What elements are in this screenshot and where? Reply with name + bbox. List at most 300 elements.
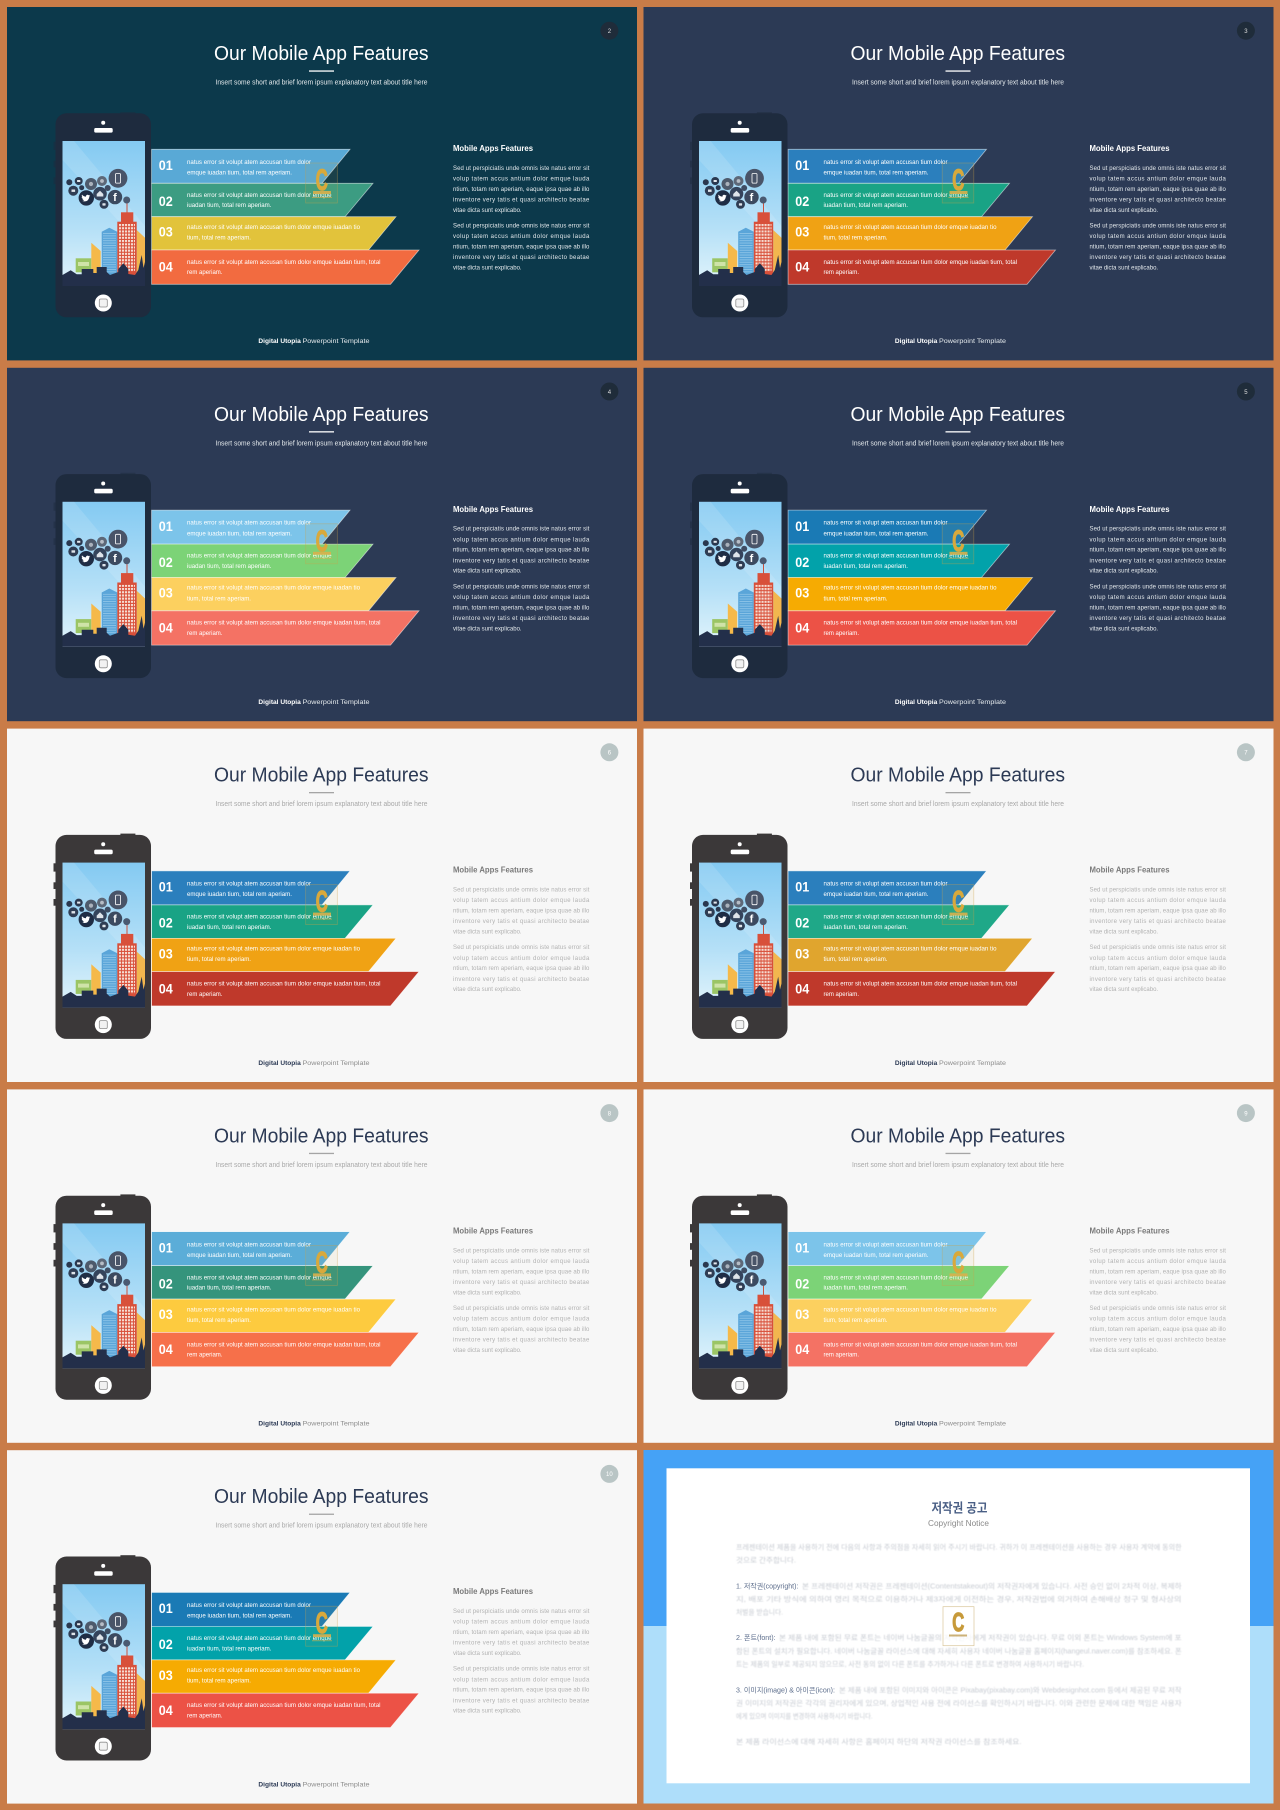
side text block: Sed ut perspiciatis unde omnis iste natus error sit (453, 1609, 590, 1615)
copyright clause 3 (736, 1686, 1182, 1720)
feature bands: 02 (159, 1636, 173, 1652)
feature bands: 03 (795, 945, 809, 961)
footer: Powerpoint Template (302, 1060, 370, 1067)
subtitle: Insert some short and brief lorem ipsum explanatory text about title here (852, 80, 1064, 86)
phone illustration (54, 473, 151, 678)
feature bands: natus error sit volupt atem accusan tium dolor emque (824, 554, 969, 560)
slide 5: navy theme vivid bands (644, 368, 1274, 721)
side text block: inventore very tatis et quasi architecto beatae (453, 1280, 590, 1286)
feature bands: iuadan tium, total rem aperiam. (824, 925, 908, 931)
side text block: inventore very tatis et quasi architecto beatae (1090, 919, 1227, 925)
side text block: Mobile Apps Features (453, 144, 534, 153)
feature bands: 02 (159, 193, 173, 209)
copyright intro (736, 1542, 1182, 1564)
side text block: vitae dicta sunt explicabo. (453, 626, 522, 632)
side text block: Sed ut perspiciatis unde omnis iste natus error sit (453, 887, 590, 893)
slide 10: light theme vivid bands (7, 1450, 637, 1804)
feature bands: emque iuadan tium, total rem aperiam. (824, 892, 929, 898)
side text block: Sed ut perspiciatis unde omnis iste natus error sit (453, 945, 590, 951)
copyright intro: 프레젠테이션 제품을 사용하기 전에 다음의 사항과 주의점을 자세히 읽어 주시기 바랍니다. 귀하가 이 프레젠테이션을 사용하는 경우 사용자 계약에 동의한 (736, 1542, 1182, 1552)
phone illustration (54, 112, 151, 317)
feature bands: 03 (159, 945, 173, 961)
phone illustration (54, 1194, 151, 1400)
side text block: ntium, totam rem aperiam, eaque ipsa quae ab illo (1090, 1327, 1227, 1333)
feature bands: tium, total rem aperiam. (187, 957, 251, 963)
feature bands: 04 (159, 1702, 173, 1718)
footer (895, 338, 1006, 345)
side text block: vitae dicta sunt explicabo. (453, 1290, 522, 1296)
side text block: ntium, totam rem aperiam, eaque ipsa quae ab illo (453, 1269, 590, 1275)
page badge (1237, 1104, 1255, 1122)
slide 2: teal theme (7, 7, 637, 360)
footer (258, 1060, 370, 1067)
footer: Digital Utopia (895, 699, 938, 706)
side text block: vitae dicta sunt explicabo. (453, 569, 522, 575)
phone illustration (690, 473, 788, 678)
feature bands: natus error sit volupt atem accusan tium dolor emque (187, 1636, 332, 1642)
slide 8: light theme (7, 1089, 637, 1443)
side text block: vitae dicta sunt explicabo. (453, 1651, 522, 1657)
page badge: 2 (608, 29, 612, 35)
side text block (453, 866, 590, 993)
side text block: ntium, totam rem aperiam, eaque ipsa quae ab illo (453, 548, 590, 554)
feature bands: 01 (795, 518, 809, 534)
feature bands: iuadan tium, total rem aperiam. (187, 1286, 272, 1292)
footer (258, 338, 370, 345)
watermark logo (306, 885, 337, 925)
feature bands: natus error sit volupt atem accusan tium dolor emque iuadan tium, total (824, 1342, 1017, 1348)
feature bands: rem aperiam. (187, 270, 223, 276)
copyright notice slide (644, 1450, 1274, 1804)
feature bands: 03 (159, 224, 173, 240)
feature bands: natus error sit volupt atem accusan tium dolor emque iuadan tio (187, 1307, 361, 1313)
side text block: ntium, totam rem aperiam, eaque ipsa quae ab illo (1090, 605, 1227, 611)
watermark logo: C (316, 1607, 328, 1640)
page badge (1237, 382, 1255, 400)
side text block: ntium, totam rem aperiam, eaque ipsa quae ab illo (453, 244, 590, 250)
footer: Digital Utopia (895, 1060, 938, 1067)
feature bands (152, 1232, 419, 1367)
subtitle: Insert some short and brief lorem ipsum explanatory text about title here (216, 1162, 428, 1169)
feature bands: 01 (795, 157, 809, 173)
feature bands: rem aperiam. (824, 631, 859, 637)
footer: Digital Utopia (895, 1421, 938, 1428)
watermark logo (942, 524, 974, 564)
side text block: vitae dicta sunt explicabo. (453, 987, 522, 993)
side text block: inventore very tatis et quasi architecto beatae (1090, 1280, 1227, 1286)
side text block: volup tatem accus antium dolor emque lauda (1090, 1259, 1227, 1265)
title: Our Mobile App Features (214, 1125, 428, 1147)
side text block (1090, 866, 1227, 993)
copyright clause 2: 트는 제품의 일부로 제공되지 않으므로, 사전 동의 없이 다른 폰트를 추가하거나 다른 폰트로 변경하여 사용하시기 바랍니다. (736, 1660, 1084, 1668)
side text block: volup tatem accus antium dolor emque lauda (453, 234, 590, 240)
side text block: inventore very tatis et quasi architecto beatae (1090, 198, 1227, 204)
feature bands: natus error sit volupt atem accusan tium dolor emque iuadan tium, total (187, 1342, 380, 1348)
side text block: volup tatem accus antium dolor emque lauda (453, 1620, 590, 1626)
side text block: Mobile Apps Features (453, 1587, 534, 1596)
copyright title: 저작권 공고 (932, 1500, 988, 1516)
subtitle: Insert some short and brief lorem ipsum explanatory text about title here (852, 1162, 1064, 1169)
watermark logo (943, 1607, 974, 1646)
side text block: ntium, totam rem aperiam, eaque ipsa quae ab illo (453, 1688, 590, 1694)
side text block: Sed ut perspiciatis unde omnis iste natus error sit (453, 224, 590, 230)
feature bands: 03 (159, 1306, 173, 1322)
copyright clause 2: 2. 폰트(font): (736, 1634, 776, 1642)
title: Our Mobile App Features (850, 1125, 1065, 1147)
feature bands: 02 (159, 1275, 173, 1291)
feature bands: 03 (795, 224, 809, 240)
feature bands: tium, total rem aperiam. (824, 236, 888, 242)
feature bands: 04 (159, 259, 173, 275)
side text block: inventore very tatis et quasi architecto beatae (1090, 558, 1227, 564)
side text block: inventore very tatis et quasi architecto beatae (1090, 1338, 1227, 1344)
slide 4: navy theme pastel bands (7, 368, 637, 721)
feature bands: iuadan tium, total rem aperiam. (187, 564, 272, 570)
copyright clause 3: 권 이미지의 저작권은 각각의 권리자에게 있으며, 상업적인 사용 전에 라이선스를 확인하시기 바랍니다. 이와 관련한 문제에 대한 책임은 사용자 (736, 1698, 1182, 1708)
feature bands: tium, total rem aperiam. (824, 957, 888, 963)
subtitle: Insert some short and brief lorem ipsum explanatory text about title here (216, 801, 428, 808)
page badge: 10 (606, 1472, 613, 1478)
footer: Digital Utopia (258, 1781, 301, 1788)
feature bands: natus error sit volupt atem accusan tium dolor emque iuadan tio (824, 586, 997, 592)
feature bands: 01 (159, 1239, 173, 1255)
footer: Digital Utopia (258, 1060, 301, 1067)
watermark logo: C (316, 525, 328, 558)
footer (895, 1421, 1006, 1428)
phone illustration (54, 834, 151, 1039)
side text block: Sed ut perspiciatis unde omnis iste natus error sit (1090, 887, 1226, 893)
feature bands: 02 (159, 915, 173, 931)
watermark logo: C (316, 1246, 328, 1279)
subtitle: Insert some short and brief lorem ipsum explanatory text about title here (216, 1523, 428, 1530)
page badge (600, 1465, 618, 1483)
side text block: Sed ut perspiciatis unde omnis iste natus error sit (453, 584, 590, 590)
feature bands (788, 871, 1056, 1006)
copyright clause 3: 에게 있으며 이미지를 변경하여 사용하시기 바랍니다. (736, 1712, 873, 1720)
copyright clause 2 (736, 1633, 1182, 1668)
feature bands: 04 (795, 980, 809, 996)
feature bands: 01 (795, 1239, 809, 1255)
copyright clause 1: 처벌을 받습니다. (736, 1608, 783, 1616)
copyright clause 3: 본 제품 내에 포함된 이미지와 아이콘은 Pixabay(pixabay.com)와 Webdesignhot.com 등에서 제공된 무료 저작 (839, 1686, 1182, 1694)
phone illustration (690, 834, 788, 1039)
footer: Powerpoint Template (939, 338, 1006, 345)
slide 7: light theme (644, 729, 1274, 1082)
side text block: vitae dicta sunt explicabo. (1090, 626, 1158, 632)
side text block: inventore very tatis et quasi architecto beatae (453, 1338, 590, 1344)
side text block: Mobile Apps Features (453, 1226, 534, 1235)
side text block: volup tatem accus antium dolor emque lauda (1090, 234, 1227, 240)
feature bands: natus error sit volupt atem accusan tium dolor emque iuadan tium, total (187, 260, 380, 266)
feature bands: 04 (159, 1341, 173, 1357)
side text block: vitae dicta sunt explicabo. (1090, 929, 1158, 935)
feature bands (788, 1232, 1056, 1367)
side text block: Mobile Apps Features (1090, 1226, 1170, 1235)
feature bands: 01 (159, 157, 173, 173)
side text block: ntium, totam rem aperiam, eaque ipsa quae ab illo (1090, 908, 1227, 914)
feature bands: 02 (159, 554, 173, 570)
feature bands: iuadan tium, total rem aperiam. (187, 203, 272, 209)
feature bands: 04 (795, 259, 809, 275)
feature bands: rem aperiam. (824, 992, 859, 998)
side text block: volup tatem accus antium dolor emque lauda (1090, 898, 1227, 904)
feature bands (788, 510, 1056, 645)
feature bands: iuadan tium, total rem aperiam. (187, 925, 272, 931)
title: Our Mobile App Features (214, 404, 428, 426)
title: Our Mobile App Features (850, 43, 1065, 65)
footer (258, 699, 370, 706)
feature bands: natus error sit volupt atem accusan tium dolor emque iuadan tium, total (187, 1703, 380, 1709)
side text block: vitae dicta sunt explicabo. (1090, 987, 1158, 993)
side text block: ntium, totam rem aperiam, eaque ipsa quae ab illo (453, 966, 590, 972)
feature bands: emque iuadan tium, total rem aperiam. (187, 1253, 292, 1259)
side text block: inventore very tatis et quasi architecto beatae (453, 558, 590, 564)
subtitle: Insert some short and brief lorem ipsum explanatory text about title here (216, 80, 428, 86)
watermark logo: C (952, 164, 964, 197)
side text block: volup tatem accus antium dolor emque lauda (453, 1317, 590, 1323)
side text block: Mobile Apps Features (453, 866, 534, 875)
page badge: 5 (1244, 390, 1248, 396)
side text block: inventore very tatis et quasi architecto beatae (453, 255, 590, 261)
feature bands: natus error sit volupt atem accusan tium dolor (824, 1242, 948, 1248)
feature bands (152, 871, 419, 1006)
footer: Powerpoint Template (302, 338, 370, 345)
feature bands (152, 510, 419, 645)
side text block: ntium, totam rem aperiam, eaque ipsa quae ab illo (453, 187, 590, 193)
side text block: vitae dicta sunt explicabo. (453, 1348, 522, 1354)
feature bands: rem aperiam. (187, 992, 223, 998)
feature bands: 01 (795, 879, 809, 895)
side text block: Mobile Apps Features (1090, 144, 1170, 153)
feature bands: natus error sit volupt atem accusan tium dolor (824, 160, 948, 166)
footer: Powerpoint Template (939, 699, 1006, 706)
feature bands: natus error sit volupt atem accusan tium dolor emque (187, 193, 332, 199)
feature bands: 04 (795, 620, 809, 636)
side text block: ntium, totam rem aperiam, eaque ipsa quae ab illo (1090, 187, 1227, 193)
side text block: vitae dicta sunt explicabo. (453, 208, 522, 214)
feature bands: emque iuadan tium, total rem aperiam. (824, 1253, 929, 1259)
subtitle: Insert some short and brief lorem ipsum explanatory text about title here (852, 440, 1064, 447)
watermark logo (306, 524, 337, 564)
side text block: ntium, totam rem aperiam, eaque ipsa quae ab illo (453, 1327, 590, 1333)
feature bands: tium, total rem aperiam. (824, 1318, 888, 1324)
footer: Digital Utopia (258, 338, 301, 345)
watermark logo (942, 885, 974, 925)
footer (895, 699, 1006, 706)
feature bands: 01 (159, 518, 173, 534)
feature bands: 03 (159, 1667, 173, 1683)
side text block: inventore very tatis et quasi architecto beatae (453, 919, 590, 925)
feature bands: 02 (795, 915, 809, 931)
feature bands: natus error sit volupt atem accusan tium dolor emque iuadan tio (187, 225, 361, 231)
feature bands: iuadan tium, total rem aperiam. (824, 203, 908, 209)
side text block: volup tatem accus antium dolor emque lauda (1090, 537, 1227, 543)
watermark logo: C (952, 1246, 964, 1279)
side text block (1090, 505, 1227, 632)
feature bands: natus error sit volupt atem accusan tium dolor emque iuadan tio (187, 946, 361, 952)
feature bands: iuadan tium, total rem aperiam. (824, 1286, 908, 1292)
footer (258, 1781, 370, 1788)
feature bands: natus error sit volupt atem accusan tium dolor (187, 521, 311, 527)
copyright clause 1: 1. 저작권(copyright): (736, 1582, 798, 1590)
feature bands (152, 1592, 419, 1728)
side text block: volup tatem accus antium dolor emque lauda (453, 595, 590, 601)
footer: Digital Utopia (258, 699, 301, 706)
feature bands: 01 (159, 879, 173, 895)
feature bands: rem aperiam. (824, 1353, 859, 1359)
side text block: ntium, totam rem aperiam, eaque ipsa quae ab illo (1090, 966, 1227, 972)
side text block: volup tatem accus antium dolor emque lauda (453, 537, 590, 543)
copyright intro: 것으로 간주합니다. (736, 1556, 796, 1564)
side text block: vitae dicta sunt explicabo. (453, 929, 522, 935)
title: Our Mobile App Features (214, 43, 428, 65)
feature bands: natus error sit volupt atem accusan tium dolor emque iuadan tio (187, 1668, 361, 1674)
feature bands: tium, total rem aperiam. (187, 596, 251, 602)
feature bands: natus error sit volupt atem accusan tium dolor emque (824, 914, 969, 920)
side text block: Mobile Apps Features (1090, 505, 1170, 514)
side text block: inventore very tatis et quasi architecto beatae (453, 198, 590, 204)
feature bands: 02 (795, 193, 809, 209)
feature bands: natus error sit volupt atem accusan tium dolor emque iuadan tio (824, 225, 997, 231)
page badge (1237, 22, 1255, 40)
side text block (1090, 144, 1227, 272)
slide 6: light theme (7, 729, 637, 1082)
side text block (453, 505, 590, 632)
feature bands: 03 (795, 584, 809, 600)
feature bands: natus error sit volupt atem accusan tium dolor emque iuadan tio (187, 586, 361, 592)
feature bands: rem aperiam. (187, 631, 223, 637)
feature bands: rem aperiam. (824, 270, 859, 276)
footer: Powerpoint Template (939, 1421, 1006, 1428)
side text block: Sed ut perspiciatis unde omnis iste natus error sit (1090, 584, 1226, 590)
feature bands: emque iuadan tium, total rem aperiam. (187, 170, 292, 176)
feature bands: tium, total rem aperiam. (187, 1679, 251, 1685)
footer (258, 1421, 370, 1428)
feature bands: natus error sit volupt atem accusan tium dolor emque (187, 1275, 332, 1281)
watermark logo (942, 163, 974, 203)
feature bands: rem aperiam. (187, 1353, 223, 1359)
copyright clause 2: 본 제품 내에 포함된 무료 폰트는 네이버 나눔글꼴의 저작권자에게 저작권이 있습니다. 무료 이외 폰트는 Windows System에 포 (779, 1633, 1182, 1642)
side text block: ntium, totam rem aperiam, eaque ipsa quae ab illo (1090, 1269, 1227, 1275)
side text block: inventore very tatis et quasi architecto beatae (1090, 255, 1227, 261)
side text block: Mobile Apps Features (453, 505, 534, 514)
feature bands: rem aperiam. (187, 1713, 223, 1719)
feature bands: emque iuadan tium, total rem aperiam. (824, 531, 929, 537)
feature bands: emque iuadan tium, total rem aperiam. (187, 1614, 292, 1620)
side text block: volup tatem accus antium dolor emque lauda (453, 898, 590, 904)
phone illustration (690, 1194, 788, 1400)
feature bands: natus error sit volupt atem accusan tium dolor emque iuadan tio (824, 946, 997, 952)
page badge (600, 743, 618, 761)
side text block: Sed ut perspiciatis unde omnis iste natus error sit (453, 1306, 590, 1312)
page badge: 6 (608, 751, 612, 757)
watermark logo: C (952, 1607, 964, 1637)
side text block: ntium, totam rem aperiam, eaque ipsa quae ab illo (1090, 548, 1227, 554)
slide 9: light theme pastel bands (644, 1089, 1274, 1443)
side text block: volup tatem accus antium dolor emque lauda (1090, 595, 1227, 601)
feature bands: 04 (159, 620, 173, 636)
feature bands: natus error sit volupt atem accusan tium dolor emque iuadan tio (824, 1307, 997, 1313)
side text block: volup tatem accus antium dolor emque lauda (453, 176, 590, 182)
title: Our Mobile App Features (214, 765, 428, 787)
feature bands (788, 149, 1056, 284)
watermark logo: C (952, 886, 964, 919)
feature bands: natus error sit volupt atem accusan tium dolor (187, 881, 311, 887)
side text block: Sed ut perspiciatis unde omnis iste natus error sit (1090, 224, 1226, 230)
title: Our Mobile App Features (850, 765, 1065, 787)
feature bands: natus error sit volupt atem accusan tium dolor (187, 1603, 311, 1609)
phone illustration (690, 112, 788, 317)
side text block: Sed ut perspiciatis unde omnis iste natus error sit (1090, 1248, 1226, 1254)
side text block: vitae dicta sunt explicabo. (1090, 266, 1158, 272)
subtitle: Insert some short and brief lorem ipsum explanatory text about title here (852, 801, 1064, 808)
side text block: volup tatem accus antium dolor emque lauda (453, 956, 590, 962)
side text block: ntium, totam rem aperiam, eaque ipsa quae ab illo (453, 1630, 590, 1636)
side text block: inventore very tatis et quasi architecto beatae (453, 616, 590, 622)
footer: Powerpoint Template (939, 1060, 1006, 1067)
feature bands: natus error sit volupt atem accusan tium dolor (187, 1242, 311, 1248)
footer: Digital Utopia (258, 1421, 301, 1428)
side text block: Sed ut perspiciatis unde omnis iste natus error sit (453, 166, 590, 172)
copyright closing line: 본 제품 라이선스에 대해 자세히 사항은 홈페이지 하단의 저작권 라이선스를 참조하세요. (736, 1737, 1022, 1746)
watermark logo (942, 1245, 974, 1285)
feature bands: natus error sit volupt atem accusan tium dolor emque (187, 914, 332, 920)
copyright clause 3: 3. 이미지(image) & 아이콘(icon): (736, 1686, 835, 1694)
page badge (600, 1104, 618, 1122)
feature bands: iuadan tium, total rem aperiam. (187, 1646, 272, 1652)
feature bands: emque iuadan tium, total rem aperiam. (824, 170, 929, 176)
page badge: 3 (1244, 29, 1248, 35)
feature bands: 02 (795, 554, 809, 570)
page badge (600, 22, 618, 40)
feature bands: natus error sit volupt atem accusan tium dolor emque iuadan tium, total (187, 621, 380, 627)
subtitle: Insert some short and brief lorem ipsum explanatory text about title here (216, 440, 428, 447)
feature bands: natus error sit volupt atem accusan tium dolor emque (824, 193, 969, 199)
feature bands: 01 (159, 1600, 173, 1616)
side text block: inventore very tatis et quasi architecto beatae (1090, 977, 1227, 983)
side text block: ntium, totam rem aperiam, eaque ipsa quae ab illo (453, 908, 590, 914)
footer: Digital Utopia (895, 338, 938, 345)
feature bands: emque iuadan tium, total rem aperiam. (187, 892, 292, 898)
feature bands: natus error sit volupt atem accusan tium dolor emque iuadan tium, total (824, 621, 1017, 627)
side text block: volup tatem accus antium dolor emque lauda (453, 1677, 590, 1683)
page badge: 4 (608, 390, 612, 396)
side text block: ntium, totam rem aperiam, eaque ipsa quae ab illo (453, 605, 590, 611)
side text block: Sed ut perspiciatis unde omnis iste natus error sit (453, 1248, 590, 1254)
side text block: Sed ut perspiciatis unde omnis iste natus error sit (1090, 945, 1226, 951)
feature bands: natus error sit volupt atem accusan tium dolor (824, 521, 948, 527)
feature bands: emque iuadan tium, total rem aperiam. (187, 531, 292, 537)
page badge: 8 (608, 1111, 612, 1117)
watermark logo (306, 1606, 337, 1646)
phone illustration (54, 1555, 151, 1760)
feature bands: natus error sit volupt atem accusan tium dolor emque iuadan tium, total (824, 981, 1017, 987)
feature bands: 03 (795, 1306, 809, 1322)
side text block: Sed ut perspiciatis unde omnis iste natus error sit (1090, 527, 1226, 533)
feature bands: natus error sit volupt atem accusan tium dolor emque iuadan tium, total (824, 260, 1017, 266)
feature bands: tium, total rem aperiam. (824, 596, 888, 602)
feature bands: 04 (795, 1341, 809, 1357)
side text block: vitae dicta sunt explicabo. (1090, 1348, 1158, 1354)
title: Our Mobile App Features (214, 1486, 428, 1508)
side text block: volup tatem accus antium dolor emque lauda (1090, 956, 1227, 962)
side text block: inventore very tatis et quasi architecto beatae (453, 1698, 590, 1704)
page badge (600, 382, 618, 400)
feature bands: 03 (159, 584, 173, 600)
watermark logo (306, 163, 337, 203)
watermark logo: C (316, 886, 328, 919)
side text block: volup tatem accus antium dolor emque lauda (1090, 176, 1227, 182)
